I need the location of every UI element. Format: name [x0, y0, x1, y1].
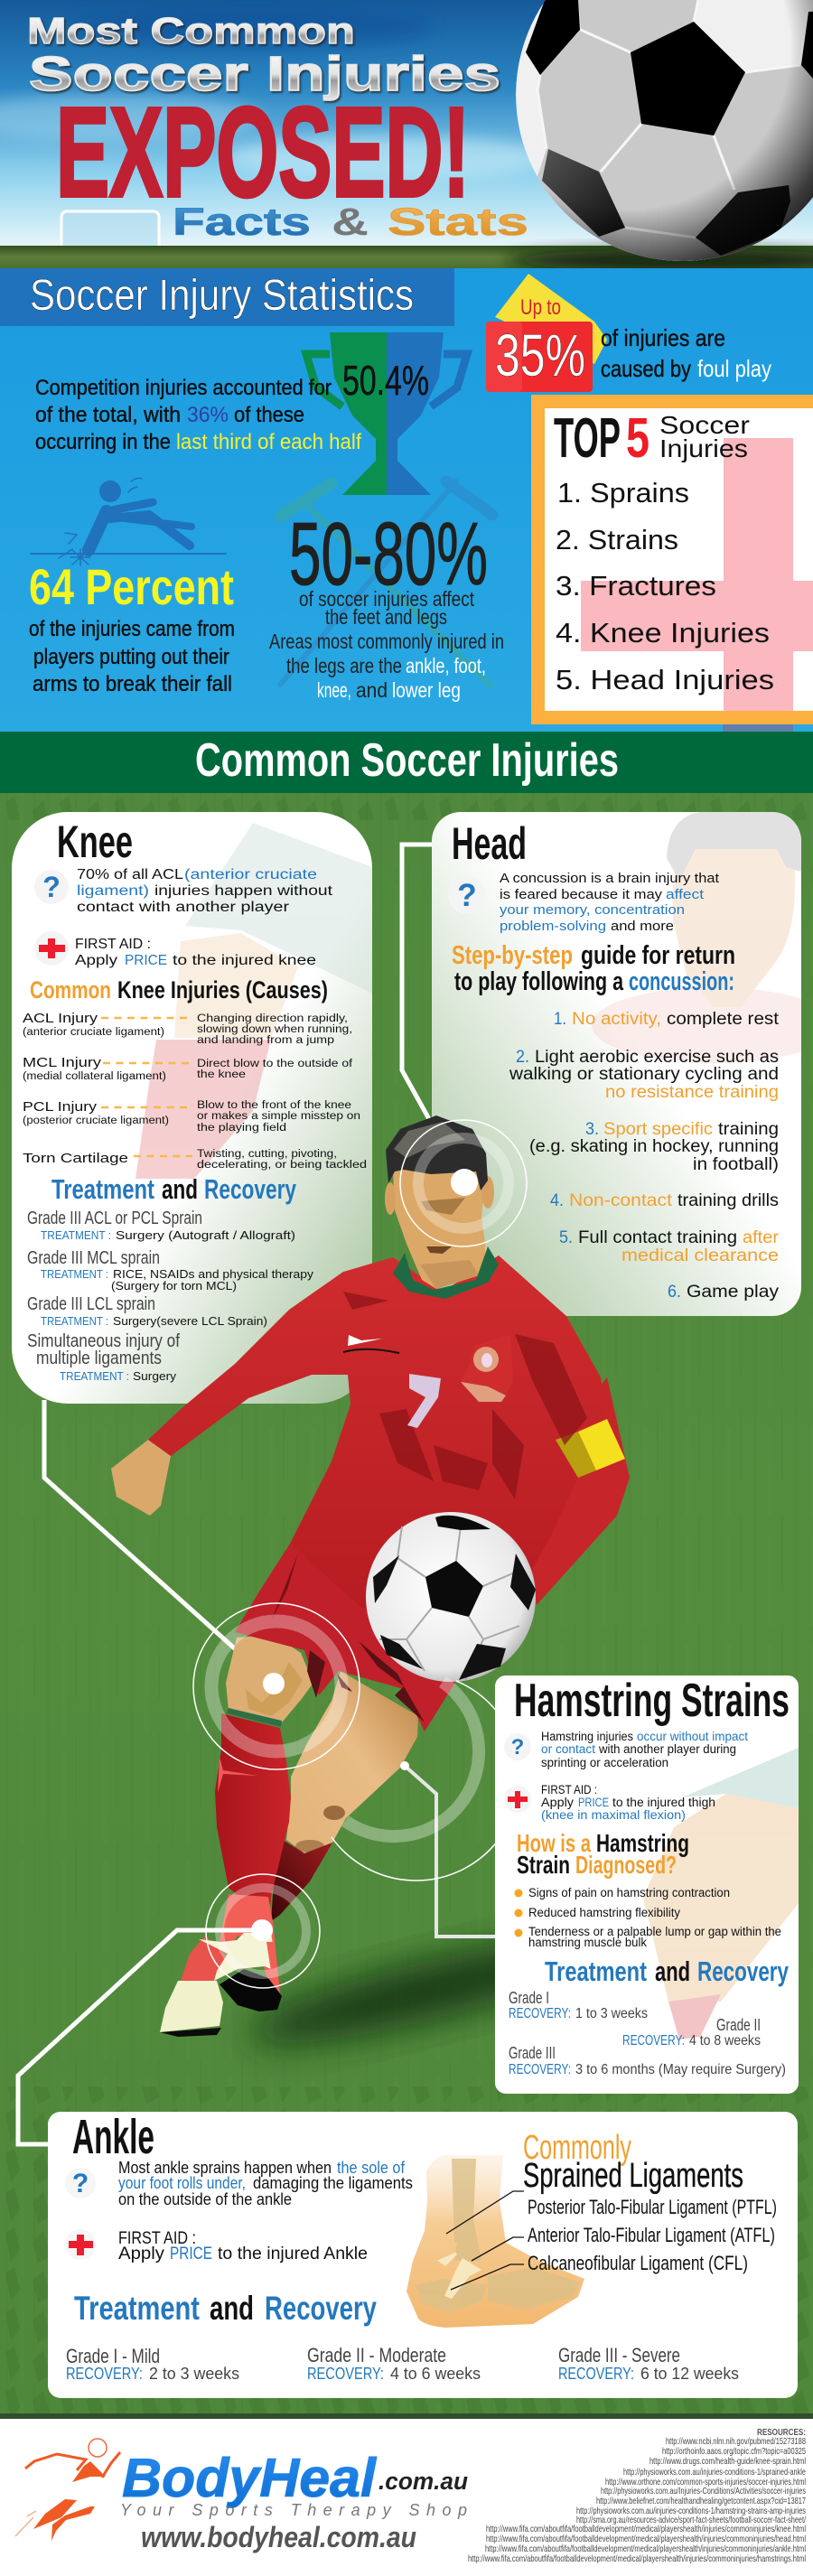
diagnosis signs list: Tenderness or a palpable lump or gap within the — [528, 1925, 781, 1938]
return to play steps: Light aerobic exercise such as — [535, 1048, 779, 1067]
callout: 35 percent foul play — [486, 274, 771, 392]
treatment list: TREATMENT : — [41, 1228, 111, 1242]
stat: 50-80 percent: and — [356, 678, 388, 702]
recovery grades: 6 to 12 weeks — [640, 2365, 739, 2383]
stat: 50-80 percent: knee, — [317, 678, 351, 702]
first aid: to the injured Ankle — [218, 2245, 368, 2263]
faded face illustration — [592, 812, 813, 1063]
question icon and fact: ? — [511, 1735, 524, 1759]
recovery grades: 4 to 8 weeks — [689, 2033, 761, 2049]
subheading: step by step guide: to play following a — [454, 967, 624, 996]
treatment list: Surgery (Autograft / Allograft) — [116, 1228, 295, 1242]
question icon and fact: occur without impact — [637, 1730, 748, 1743]
injury causes table: (posterior cruciate ligament) — [23, 1115, 169, 1126]
stat: competition injuries — [35, 357, 429, 454]
question icon and fact: ? — [457, 878, 477, 913]
subheading: treatment and recovery: Recovery — [265, 2290, 377, 2327]
front knee — [226, 1635, 313, 1722]
return to play steps: 4. — [550, 1191, 564, 1210]
back leg — [286, 1671, 418, 1853]
return to play steps: medical clearance — [621, 1246, 779, 1265]
subheading: treatment and recovery: Treatment — [545, 1955, 647, 1987]
treatment list: Surgery — [133, 1369, 177, 1383]
logo: bodyheal wordmark: Your Sports Therapy Shop — [120, 2501, 467, 2519]
first aid: FIRST AID : — [75, 937, 151, 952]
hand — [111, 1440, 171, 1516]
resources list — [468, 2427, 806, 2564]
icon: match ball — [366, 1512, 536, 1682]
recovery grades: Grade II - Moderate — [307, 2344, 446, 2366]
first aid — [34, 931, 316, 968]
subheading: common knee injuries — [30, 976, 328, 1003]
return to play steps: (e.g. skating in hockey, running — [529, 1137, 779, 1156]
logo: bodyheal wordmark: BodyHeal — [122, 2448, 377, 2508]
question icon and fact: your memory, concentration — [500, 903, 685, 918]
recovery grades — [509, 1989, 786, 2077]
panel: top 5 soccer injuries: 3. Fractures — [556, 570, 716, 602]
question icon and fact: or contact — [541, 1742, 595, 1756]
injury causes table: Direct blow to the outside of — [197, 1059, 353, 1069]
swoosh — [343, 1335, 399, 1353]
return to play steps: complete rest — [667, 1010, 780, 1029]
marker: ankle — [18, 1874, 320, 2144]
title: Soccer Injuries — [29, 47, 500, 101]
subheading: diagnosis — [517, 1829, 689, 1879]
stat: 64 percent: players putting out their — [33, 645, 229, 669]
recovery grades — [66, 2344, 739, 2383]
illustration: ankle anatomy — [406, 2155, 584, 2328]
logo: bodyheal wordmark: .com.au — [378, 2468, 468, 2495]
treatment list: Grade III MCL sprain — [27, 1248, 160, 1268]
question icon and fact: affect — [666, 888, 704, 902]
panel: top 5 soccer injuries: 1. Sprains — [557, 477, 689, 509]
heading: Head — [452, 818, 527, 869]
question icon and fact — [34, 867, 333, 915]
stat: 64 percent: of the injuries came from — [29, 617, 235, 641]
question icon and fact: injuries happen without — [154, 883, 333, 899]
recovery grades: Grade III - Severe — [558, 2344, 680, 2366]
connector: knee — [44, 1400, 274, 1684]
collar — [393, 1246, 499, 1299]
subheading: treatment and recovery — [51, 1173, 297, 1205]
subheading: diagnosis: How is a — [517, 1829, 591, 1857]
first aid: Apply — [541, 1796, 574, 1809]
sprained ligaments labels — [523, 2129, 777, 2274]
return to play steps: Non-contact — [569, 1191, 673, 1210]
question icon and fact — [65, 2158, 413, 2208]
stat: competition injuries: Competition injuries accounted for — [35, 376, 332, 400]
panel: top 5 soccer injuries: 4. Knee Injuries — [556, 617, 770, 649]
recovery grades: Grade I — [509, 1989, 549, 2007]
subheading: treatment and recovery: Recovery — [204, 1173, 297, 1205]
icon: pink cross — [581, 438, 813, 711]
question icon and fact: and more — [611, 919, 674, 934]
recovery grades: Grade II — [716, 2016, 761, 2034]
question icon and fact — [504, 1730, 748, 1769]
subheading: common knee injuries: Knee Injuries (Causes) — [117, 976, 328, 1003]
connector: head — [402, 845, 464, 1182]
recovery grades: 4 to 6 weeks — [390, 2365, 481, 2383]
question icon and fact: 70% of all ACL — [77, 867, 183, 882]
subheading: step by step guide: Step-by-step — [452, 941, 573, 970]
question icon and fact: on the outside of the ankle — [118, 2189, 292, 2208]
recovery grades: RECOVERY: — [66, 2365, 143, 2383]
question icon and fact: ? — [72, 2169, 89, 2198]
callout: 35 percent foul play: 35% — [495, 322, 585, 388]
heading: Knee — [57, 817, 133, 867]
panel: top 5 soccer injuries — [531, 395, 813, 732]
injury causes table: the knee — [197, 1069, 246, 1080]
marker: knee — [193, 1603, 360, 1769]
number 7 — [407, 1374, 441, 1428]
question icon and fact: ligament) — [77, 883, 149, 899]
stat: 64 percent: arms to break their fall — [33, 672, 232, 696]
logo: bodyheal wordmark — [120, 2448, 468, 2553]
panel: head — [432, 812, 813, 1316]
first aid: PRICE — [125, 953, 167, 968]
icon: large soccer ball — [506, 0, 813, 271]
title: Facts — [173, 201, 311, 244]
panel: top 5 soccer injuries: 2. Strains — [556, 524, 678, 555]
treatment list: Surgery(severe LCL Sprain) — [113, 1314, 267, 1328]
first aid: to the injured thigh — [612, 1796, 715, 1809]
title: Stats — [388, 201, 528, 244]
return to play steps: no resistance training — [605, 1083, 779, 1102]
injury causes table: MCL Injury — [23, 1055, 102, 1070]
injury causes table: Changing direction rapidly, — [197, 1013, 348, 1024]
first aid — [504, 1783, 715, 1822]
return to play steps — [509, 1010, 780, 1302]
sprained ligaments labels: Commonly — [523, 2129, 631, 2167]
treatment list: Grade III ACL or PCL Sprain — [27, 1209, 202, 1228]
title: EXPOSED! — [56, 80, 470, 223]
panel: statistics — [0, 268, 813, 732]
treatment list: TREATMENT : — [41, 1267, 108, 1281]
callout: 35 percent foul play: of injuries are — [601, 324, 725, 351]
first aid: FIRST AID : — [118, 2229, 196, 2248]
question icon and fact: sprinting or acceleration — [541, 1756, 668, 1769]
heading bar: Soccer Injury Statistics — [30, 272, 414, 320]
return to play steps: training drills — [678, 1191, 779, 1210]
recovery grades: RECOVERY: — [558, 2365, 634, 2383]
stat: 50-80 percent: ankle, foot, — [406, 654, 486, 677]
question icon and fact: is feared because it may — [500, 888, 663, 902]
question icon and fact: your foot rolls under, — [118, 2173, 246, 2192]
treatment list: Grade III LCL sprain — [27, 1294, 155, 1314]
callout: 35 percent foul play: foul play — [697, 355, 771, 382]
question icon and fact: A concussion is a brain injury that — [500, 872, 719, 886]
badge — [461, 1335, 513, 1402]
icon: trophy — [306, 332, 467, 495]
recovery grades: RECOVERY: — [509, 2006, 571, 2021]
back shoe — [181, 1936, 228, 1981]
recovery grades: 1 to 3 weeks — [575, 2006, 648, 2021]
panel: top 5 soccer injuries: TOP — [554, 407, 621, 470]
return to play steps: 3. — [585, 1120, 599, 1139]
stat: 50-80 percent: lower leg — [392, 678, 461, 702]
panel: top 5 soccer injuries: 5 — [626, 407, 649, 470]
heading: Ankle — [72, 2110, 154, 2164]
subheading: treatment and recovery — [545, 1955, 790, 1987]
stat: competition injuries: occurring in the — [35, 430, 171, 454]
subheading: treatment and recovery: Treatment — [74, 2290, 200, 2327]
question icon and fact: contact with another player — [77, 900, 289, 915]
first aid: (knee in maximal flexion) — [541, 1808, 686, 1822]
panel: footer — [0, 2419, 813, 2576]
logo: bodyheal wordmark: www.bodyheal.com.au — [141, 2521, 416, 2553]
icon: falling player — [31, 478, 226, 565]
injury causes table: and landing from a jump — [197, 1035, 334, 1046]
header banner — [0, 0, 813, 271]
stat: 50-80 percent — [269, 504, 504, 702]
stat: competition injuries: of these — [234, 403, 304, 427]
treatment list: TREATMENT : — [60, 1369, 129, 1383]
return to play steps: No activity, — [572, 1010, 661, 1029]
treatment list: (Surgery for torn MCL) — [111, 1279, 237, 1293]
diagnosis signs list: Signs of pain on hamstring contraction — [528, 1886, 730, 1899]
callout: 35 percent foul play: caused by — [601, 355, 691, 382]
return to play steps: 1. — [554, 1010, 566, 1029]
panel: top 5 soccer injuries: 5. Head Injuries — [556, 664, 774, 695]
stat: competition injuries: of the total, with — [35, 403, 181, 427]
title — [27, 10, 528, 244]
diagnosis signs list: hamstring muscle bulk — [528, 1936, 647, 1949]
heading: common soccer injuries — [0, 732, 813, 793]
first aid: Apply — [75, 953, 117, 968]
panel: field background — [0, 793, 813, 2419]
first aid: to the injured knee — [173, 953, 316, 968]
question icon and fact: ? — [42, 871, 61, 903]
injury causes table: Twisting, cutting, pivoting, — [197, 1149, 337, 1160]
diagnosis signs list — [515, 1886, 781, 1949]
goal frame — [61, 211, 159, 246]
stat: 50-80 percent: 50-80% — [289, 504, 488, 603]
return to play steps: training — [718, 1120, 779, 1139]
return to play steps: 5. — [559, 1228, 573, 1247]
injury causes table: (anterior cruciate ligament) — [23, 1027, 164, 1038]
subheading: treatment and recovery: and — [162, 1173, 198, 1205]
question icon and fact: damaging the ligaments — [253, 2173, 413, 2192]
recovery grades: 3 to 6 months (May require Surgery) — [575, 2062, 786, 2077]
subheading: step by step guide: concussion: — [629, 967, 734, 996]
turf strip — [0, 246, 813, 268]
subheading: treatment and recovery: Treatment — [51, 1173, 154, 1205]
return to play steps: after — [743, 1228, 780, 1247]
diagnosis signs list: Reduced hamstring flexibility — [528, 1906, 680, 1919]
back sock — [271, 1840, 332, 1921]
stat: 50-80 percent: of soccer injuries affect — [299, 587, 475, 611]
callout: 35 percent foul play: Up to — [520, 295, 561, 320]
recovery grades: RECOVERY: — [307, 2365, 384, 2383]
subheading: treatment and recovery — [74, 2290, 377, 2327]
return to play steps: in football) — [693, 1155, 779, 1174]
subheading: diagnosis: Hamstring — [596, 1829, 689, 1857]
far arm — [528, 1377, 630, 1605]
subheading: step by step guide: guide for return — [581, 941, 735, 970]
injury causes table: the playing field — [197, 1123, 286, 1134]
recovery grades: RECOVERY: — [509, 2062, 571, 2077]
shorts — [235, 1499, 506, 1731]
stat: competition injuries: 36% — [187, 403, 229, 427]
return to play steps: walking or stationary cycling and — [509, 1065, 779, 1084]
question icon and fact: with another player during — [598, 1742, 736, 1756]
front shoe — [220, 1894, 280, 1993]
title: Most Common — [27, 10, 355, 51]
ligament leader lines — [446, 2191, 524, 2290]
shadow under player — [242, 1920, 607, 2063]
logo: runner — [15, 2439, 120, 2541]
subheading: common knee injuries: Common — [30, 976, 111, 1003]
injury causes table: or makes a simple misstep on — [197, 1111, 360, 1122]
front sock — [215, 1713, 291, 1921]
question icon and fact: problem-solving — [500, 919, 606, 934]
treatment list: multiple ligaments — [36, 1349, 162, 1368]
injury causes table: ACL Injury — [23, 1011, 98, 1026]
treatment list: TREATMENT : — [41, 1314, 108, 1328]
stat: competition injuries: 50.4% — [342, 357, 429, 404]
injury causes table: Torn Cartilage — [23, 1151, 128, 1166]
first aid: FIRST AID : — [541, 1783, 597, 1797]
shirt — [148, 1255, 607, 1617]
faded leg illustration — [643, 1748, 799, 2039]
injury causes table: slowing down when running, — [197, 1024, 352, 1035]
stat: 50-80 percent: the legs are the — [286, 654, 402, 677]
marker: hamstring — [332, 1681, 519, 1937]
subheading: treatment and recovery: and — [655, 1955, 690, 1987]
injury causes table: PCL Injury — [23, 1099, 98, 1115]
illustration: soccer player — [111, 1115, 630, 2037]
stat: 64 percent: 64 Percent — [29, 558, 234, 615]
return to play steps: 6. — [668, 1283, 681, 1302]
treatment list: RICE, NSAIDs and physical therapy — [113, 1267, 314, 1281]
subheading: treatment and recovery: and — [210, 2290, 254, 2327]
stat: competition injuries: last third of each half — [176, 430, 361, 454]
return to play steps: 2. — [516, 1048, 529, 1067]
panel: ankle — [48, 2110, 798, 2398]
injury causes table — [23, 1011, 367, 1171]
title: & — [332, 201, 369, 244]
stat: 50-80 percent: the feet and legs — [325, 605, 447, 629]
icon: crutches — [280, 481, 492, 685]
question icon and fact: Hamstring injuries — [541, 1730, 633, 1743]
treatment list: Simultaneous injury of — [27, 1331, 180, 1351]
recovery grades: RECOVERY: — [622, 2033, 685, 2049]
panel: knee — [12, 812, 372, 1404]
marker: head — [400, 1120, 527, 1246]
injury causes table: Blow to the front of the knee — [197, 1100, 351, 1111]
panel: hamstring strains — [495, 1675, 799, 2094]
injury causes table: decelerating, or being tackled — [197, 1160, 367, 1171]
stat: 50-80 percent: Areas most commonly injured in — [269, 630, 504, 653]
recovery grades: 2 to 3 weeks — [149, 2365, 239, 2383]
question icon and fact: (anterior cruciate — [184, 867, 317, 882]
shirt folds — [343, 1292, 587, 1499]
ball shadow — [506, 249, 813, 271]
recovery grades: Grade III — [509, 2044, 556, 2062]
question icon and fact: the sole of — [337, 2158, 406, 2177]
return to play steps: Sport specific — [603, 1120, 713, 1139]
return to play steps: Full contact training — [578, 1228, 737, 1247]
heading: common soccer injuries: Common Soccer Injuries — [195, 734, 619, 787]
subheading: diagnosis: Diagnosed? — [575, 1851, 677, 1879]
stat: 64 percent — [29, 558, 235, 696]
panel: top 5 soccer injuries: Soccer — [659, 411, 750, 439]
armband — [556, 1432, 596, 1478]
sprained ligaments labels: Calcaneofibular Ligament (CFL) — [528, 2252, 748, 2274]
faded leg illustration — [136, 823, 372, 1179]
subheading: step by step guide — [452, 941, 735, 996]
first aid: Apply — [118, 2245, 165, 2263]
panel: top 5 soccer injuries: Injuries — [659, 434, 748, 462]
question icon and fact — [448, 872, 719, 934]
subheading: diagnosis: Strain — [517, 1851, 570, 1879]
injury causes table: (medial collateral ligament) — [23, 1071, 166, 1082]
first aid: PRICE — [170, 2245, 212, 2263]
first aid — [65, 2229, 368, 2263]
treatment list — [27, 1209, 314, 1383]
head — [385, 1115, 494, 1289]
question icon and fact: Most ankle sprains happen when — [118, 2158, 332, 2177]
return to play steps: Game play — [687, 1283, 780, 1302]
recovery grades: Grade I - Mild — [66, 2345, 160, 2367]
first aid: PRICE — [578, 1796, 609, 1809]
